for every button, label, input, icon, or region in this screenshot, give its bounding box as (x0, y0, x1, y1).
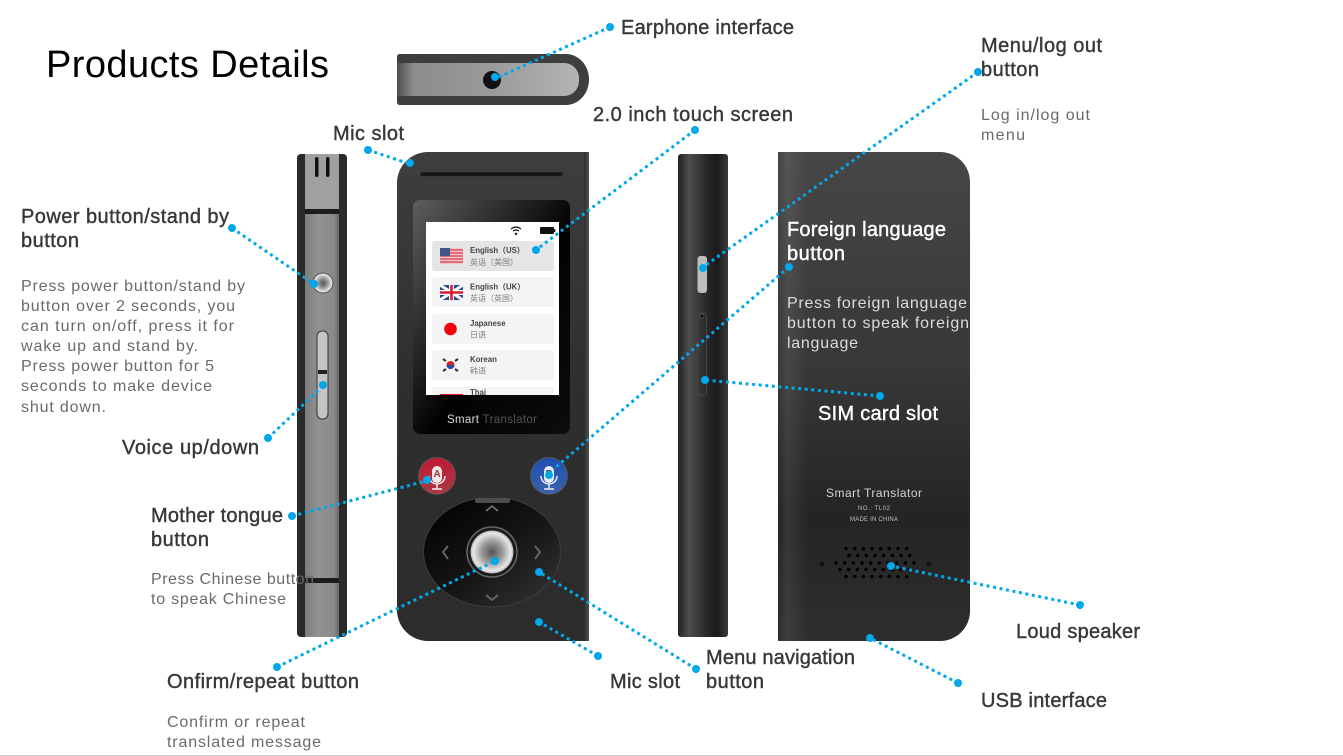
foreign language button: B (546, 469, 553, 480)
label: mother tongue (151, 505, 314, 608)
label: confirm/repeat (167, 671, 359, 751)
icon: power button (313, 273, 333, 293)
navigation pad (424, 497, 560, 607)
foreign language / menu side button (698, 256, 707, 293)
leader: loud speaker (887, 562, 1084, 609)
row: English UK: English（UK） (470, 282, 525, 292)
label: power button: seconds to make device (21, 378, 212, 395)
leader: foreign language (545, 263, 793, 479)
label: foreign language: button (787, 243, 845, 265)
label: confirm/repeat: Onfirm/repeat button (167, 671, 359, 693)
label: power button: button (21, 230, 79, 252)
label: menu navigation: button (706, 671, 764, 693)
label: mother tongue: Mother tongue (151, 505, 283, 527)
leader: power button (228, 224, 318, 288)
label: power button: Press power button/stand by (21, 278, 245, 295)
screen (426, 222, 559, 400)
leader: mother tongue (288, 476, 431, 520)
row: English UK: 英语（英国） (470, 293, 518, 303)
label: confirm/repeat: Confirm or repeat (167, 714, 306, 731)
label: power button: can turn on/off, press it for (21, 318, 235, 335)
row: Thai: Thai (470, 388, 486, 397)
leader: confirm/repeat (273, 557, 499, 671)
leader: USB interface (866, 634, 962, 687)
leader: menu button (699, 68, 982, 272)
icon: wifi (511, 227, 521, 234)
row: Japanese: Japanese (470, 319, 506, 328)
screen bezel (413, 200, 570, 434)
label: mother tongue: to speak Chinese (151, 591, 286, 608)
label: power button: Power button/stand by (21, 206, 229, 228)
label: confirm/repeat: translated message (167, 734, 321, 751)
label: touch screen: 2.0 inch touch screen (593, 104, 793, 126)
row: Korean (432, 350, 554, 380)
speaker grille (836, 548, 916, 576)
leader: touch screen (532, 126, 699, 254)
back brand text: MADE IN CHINA (850, 517, 898, 523)
device name on screen bezel: Smart Translator (447, 414, 537, 426)
row: English UK (432, 277, 554, 307)
mother tongue button (418, 457, 456, 495)
row: Japanese (432, 314, 554, 344)
leader: SIM card slot (701, 376, 884, 400)
leader: earphone interface (491, 23, 614, 81)
leader: mic slot top (364, 146, 414, 167)
title: Products Details (46, 44, 329, 86)
label: mic slot top: Mic slot (333, 123, 404, 145)
label: mother tongue: Press Chinese button (151, 571, 314, 588)
row: Japanese: 日语 (470, 330, 486, 340)
row: Thai (432, 387, 554, 397)
device: back view (778, 152, 970, 641)
label: voice up/down: Voice up/down (122, 437, 259, 459)
label: foreign language: Foreign language (787, 219, 946, 241)
device: left side view (297, 154, 347, 637)
row: English US: 英语（美国） (470, 257, 518, 267)
device: top view with earphone jack (397, 54, 589, 105)
back brand text: NO.: TL02 (858, 506, 891, 512)
icon: volume rocker (317, 331, 328, 419)
label: foreign language: language (787, 335, 858, 352)
leader: voice up/down (264, 381, 327, 442)
leader: menu navigation (535, 568, 700, 673)
label: loud speaker: Loud speaker (1016, 621, 1140, 643)
label: earphone interface: Earphone interface (621, 17, 794, 39)
label: menu/log out button: button (981, 59, 1039, 81)
label: SIM card slot: SIM card slot (818, 403, 938, 425)
label: foreign language: button to speak foreign (787, 315, 969, 332)
label: power button: shut down. (21, 399, 106, 416)
label: power button (20, 206, 245, 416)
back brand text: Smart Translator (826, 486, 922, 500)
device: front view (397, 152, 589, 641)
sim card tray (697, 313, 706, 395)
row: Korean: 韩语 (470, 366, 486, 376)
icon: battery (540, 227, 555, 234)
label: menu/log out button (981, 35, 1102, 144)
label: menu navigation: Menu navigation (706, 647, 855, 669)
label: mic slot bottom: Mic slot (610, 671, 680, 693)
label: mother tongue: button (151, 529, 209, 551)
label: foreign language (787, 219, 969, 352)
device: right side view (678, 154, 728, 637)
foreign language button (530, 457, 568, 495)
label: power button: wake up and stand by. (20, 338, 198, 355)
row: English US: English（US） (470, 246, 525, 255)
earpiece slot (420, 172, 563, 176)
label: menu/log out button: menu (981, 127, 1025, 144)
label: power button: Press power button for 5 (21, 358, 214, 375)
label: foreign language: Press foreign language (787, 295, 967, 312)
label: USB interface: USB interface (981, 690, 1107, 712)
label: menu/log out button: Menu/log out (981, 35, 1102, 57)
row: English US (432, 241, 554, 271)
mother tongue button: A (434, 469, 441, 480)
back brand text (826, 486, 922, 523)
label: menu navigation (706, 647, 855, 693)
label: power button: button over 2 seconds, you (21, 298, 235, 315)
label: menu/log out button: Log in/log out (981, 107, 1091, 124)
leader: mic slot bottom (535, 618, 602, 660)
row: Korean: Korean (470, 355, 497, 364)
